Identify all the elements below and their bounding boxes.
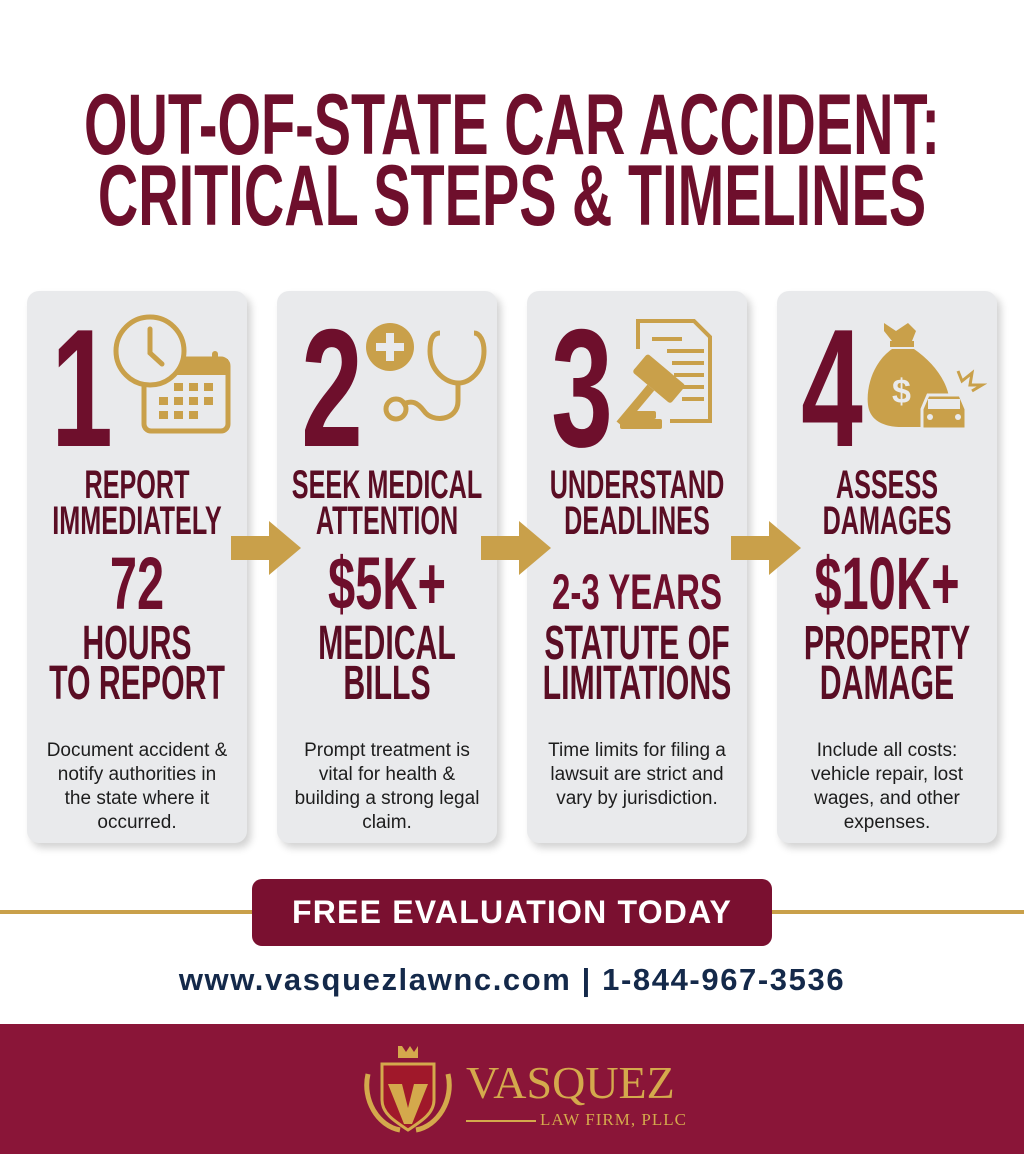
stat label bbox=[804, 617, 970, 710]
logo subtitle: LAW FIRM, PLLC bbox=[540, 1110, 687, 1129]
stat: 2-3 YEARS bbox=[552, 564, 722, 620]
stat label: PROPERTY bbox=[804, 617, 970, 670]
heading: REPORT bbox=[84, 463, 190, 507]
stat label: DAMAGE bbox=[820, 657, 954, 710]
stat label: STATUTE OF bbox=[544, 617, 730, 670]
heading: DEADLINES bbox=[564, 499, 710, 543]
number 1: 1 bbox=[51, 294, 113, 482]
contact line: www.vasquezlawnc.com | 1-844-967-3536 bbox=[179, 962, 845, 997]
logo text: VASQUEZ bbox=[466, 1057, 675, 1108]
stat: 72 bbox=[110, 542, 164, 625]
heading: UNDERSTAND bbox=[550, 463, 724, 507]
number 4: 4 bbox=[801, 294, 863, 482]
arrow 3 bbox=[731, 521, 801, 575]
stat label: LIMITATIONS bbox=[543, 657, 731, 710]
number 3: 3 bbox=[551, 294, 613, 482]
stat label: MEDICAL bbox=[318, 617, 456, 670]
heading: SEEK MEDICAL bbox=[292, 463, 482, 507]
icon: gavel and document bbox=[616, 319, 712, 429]
icon: clock and calendar bbox=[114, 314, 230, 434]
logo emblem bbox=[364, 1046, 452, 1132]
title: CRITICAL STEPS & TIMELINES bbox=[98, 148, 926, 244]
stat: $5K+ bbox=[328, 542, 446, 625]
heading: ATTENTION bbox=[316, 499, 458, 543]
icon: money bag and car: $ bbox=[892, 373, 911, 411]
divider line bbox=[0, 910, 1024, 914]
number 2: 2 bbox=[301, 294, 363, 482]
stat label bbox=[49, 617, 225, 710]
stat: $10K+ bbox=[814, 542, 960, 625]
heading bbox=[823, 463, 951, 543]
panel: step 2 bbox=[277, 291, 497, 843]
title: OUT-OF-STATE CAR ACCIDENT: bbox=[84, 77, 940, 173]
panel: step 4 bbox=[777, 291, 997, 843]
CTA button: FREE EVALUATION TODAY bbox=[292, 894, 732, 930]
heading: ASSESS bbox=[836, 463, 938, 507]
heading bbox=[52, 463, 222, 543]
arrow 2 bbox=[481, 521, 551, 575]
panel: step 3 bbox=[527, 291, 747, 843]
description: Time limits for filing a lawsuit are strict and vary by jurisdiction. bbox=[548, 740, 726, 809]
title bbox=[84, 77, 940, 244]
arrow 1 bbox=[231, 521, 301, 575]
stat label: TO REPORT bbox=[49, 657, 225, 710]
heading: DAMAGES bbox=[823, 499, 951, 543]
panel: step 1 bbox=[27, 291, 247, 843]
description: Document accident & notify authorities in the state where it occurred. bbox=[47, 740, 227, 833]
icon: money bag and car bbox=[868, 323, 987, 428]
heading bbox=[292, 463, 482, 543]
stat label bbox=[318, 617, 456, 710]
stat label: HOURS bbox=[82, 617, 192, 670]
footer bar bbox=[0, 1024, 1024, 1154]
description: Prompt treatment is vital for health & building a strong legal claim. bbox=[295, 740, 479, 833]
CTA button bbox=[252, 879, 772, 946]
description: Include all costs: vehicle repair, lost wages, and other expenses. bbox=[811, 740, 963, 833]
stat label bbox=[543, 617, 731, 710]
stat label: BILLS bbox=[343, 657, 431, 710]
heading: IMMEDIATELY bbox=[52, 499, 222, 543]
heading bbox=[550, 463, 724, 543]
icon: medical stethoscope bbox=[366, 323, 486, 422]
